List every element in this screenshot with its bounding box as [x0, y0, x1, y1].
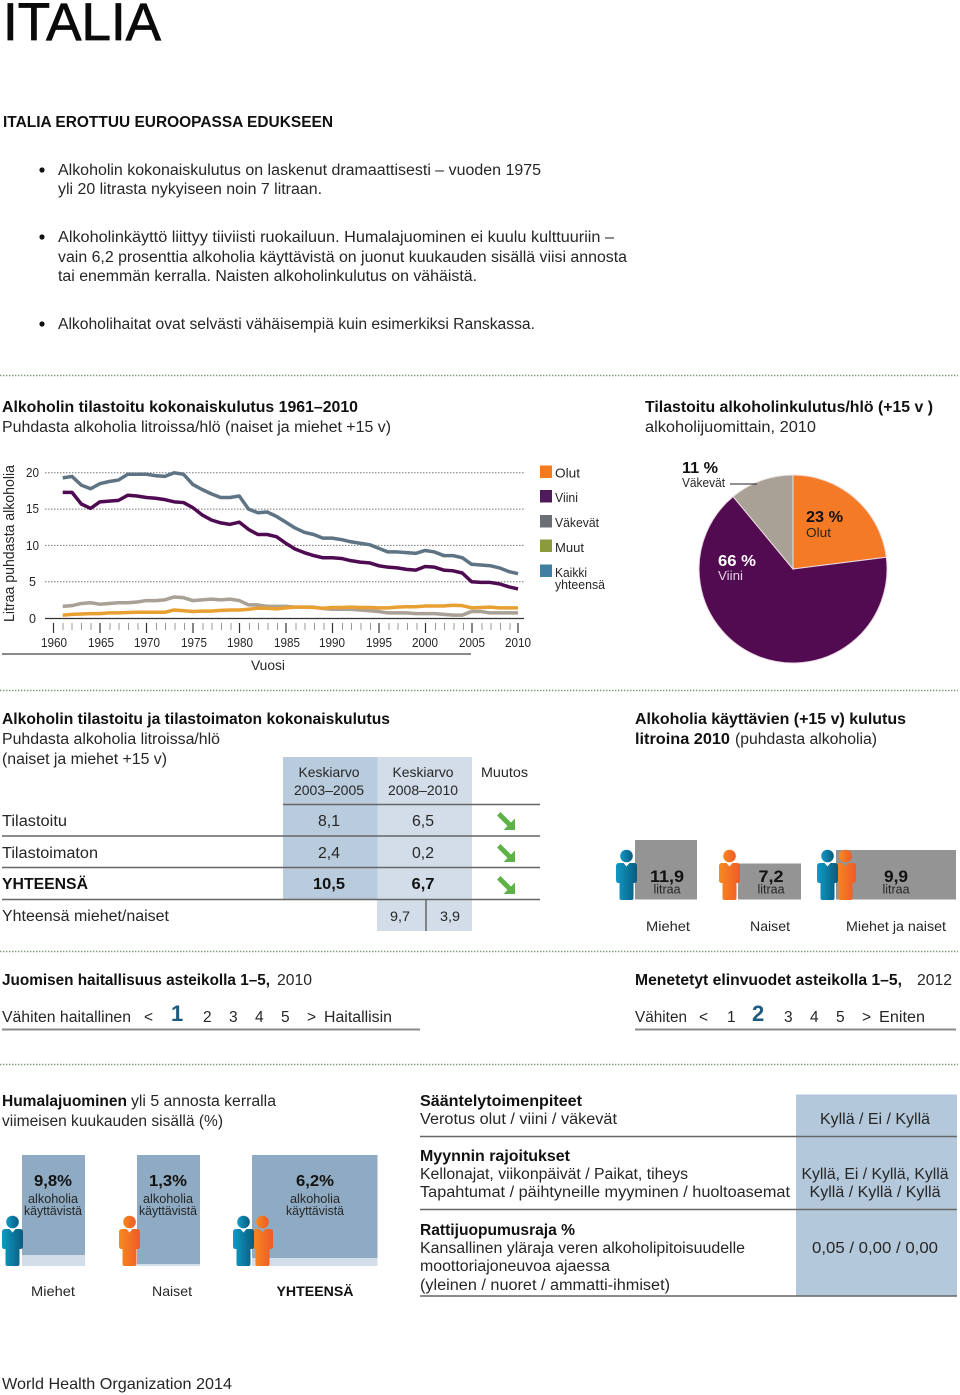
heading: consumption by beverage: alkoholijuomittain, 2010 — [645, 419, 816, 436]
scale: harmfulness of drinking: Juomisen haitallisuus asteikolla 1–5, — [2, 972, 270, 989]
pictogram: men heavy drinking: käyttävistä — [24, 1203, 83, 1218]
x axis labels: 1995 — [366, 636, 392, 650]
heading: total consumption chart: Alkoholin tilastoitu kokonaiskulutus 1961–2010 — [2, 399, 358, 416]
pictogram: women heavy drinking: 1,3% — [149, 1173, 187, 1190]
y axis labels: 5 — [29, 575, 36, 589]
y axis labels: 15 — [26, 502, 39, 516]
pictogram: men litres: litraa — [654, 882, 681, 896]
row: sales restrictions: Kellonajat, viikonpäivät / Paikat, tiheys — [420, 1166, 688, 1183]
label: spirits: 11 % — [682, 460, 718, 477]
heading: heavy episodic drinking: Humalajuominen — [2, 1093, 127, 1110]
pictogram: total heavy drinking: alkoholia — [290, 1191, 341, 1206]
pictogram: men heavy drinking: 9,8% — [34, 1173, 72, 1190]
x axis labels: 1960 — [41, 636, 67, 650]
pictogram: women heavy drinking: alkoholia — [143, 1191, 194, 1206]
row: sales restrictions: Tapahtumat / päihtyneille myyminen / huoltoasemat — [420, 1184, 791, 1201]
scale: harmfulness of drinking: 2 — [203, 1009, 212, 1026]
row: regulation — [420, 1093, 930, 1128]
row: drink-driving limit: (yleinen / nuoret / ammatti-ihmiset) — [420, 1277, 670, 1294]
pictogram: women litres — [719, 850, 801, 934]
pictogram: total heavy drinking: YHTEENSÄ — [276, 1283, 354, 1299]
legend: yhteensä — [555, 578, 605, 592]
scale: harmfulness of drinking: 1 — [171, 1001, 183, 1026]
x axis labels: 1980 — [227, 636, 253, 650]
row: sales restrictions: Kyllä / Kyllä / Kyllä — [810, 1184, 941, 1201]
x axis labels: 1975 — [181, 636, 207, 650]
label: wine: Viini — [718, 569, 743, 583]
row: sales restrictions: Myynnin rajoitukset — [420, 1148, 570, 1165]
y axis labels: 10 — [26, 539, 39, 553]
text block: key points — [39, 162, 627, 333]
pie chart: consumption by beverage — [682, 460, 887, 663]
heading: recorded and unrecorded consumption: Puhdasta alkoholia litroissa/hlö — [2, 731, 220, 748]
pictogram: women litres: Naiset — [750, 918, 790, 934]
row: regulation: Sääntelytoimenpiteet — [420, 1093, 582, 1110]
pictogram: men litres: Miehet — [646, 918, 690, 934]
scale: harmfulness of drinking: < — [144, 1009, 153, 1026]
heading: heavy episodic drinking: viimeisen kuukauden sisällä (%) — [2, 1113, 223, 1130]
pictogram: total heavy drinking — [233, 1155, 378, 1299]
scale: harmfulness of drinking: Haitallisin — [324, 1009, 392, 1026]
pictogram: total heavy drinking: 6,2% — [296, 1173, 334, 1190]
pictogram: men litres — [616, 840, 697, 934]
row: men/women — [2, 908, 460, 925]
heading: consumption of drinkers: litroina 2010 — [635, 731, 730, 748]
row: sales restrictions: Kyllä, Ei / Kyllä, Kyllä — [802, 1166, 949, 1183]
label: beer — [806, 509, 843, 540]
heading: consumption by beverage — [645, 399, 933, 436]
scale: years of life lost: Eniten — [879, 1009, 925, 1026]
legend: Kaikki — [555, 566, 587, 580]
row: total: YHTEENSÄ — [2, 876, 88, 893]
pictogram: men litres: 11,9 — [650, 867, 684, 886]
pictogram: all litres: litraa — [882, 882, 910, 896]
x axis title: Vuosi — [251, 657, 285, 673]
legend: Olut — [555, 466, 581, 480]
scale: years of life lost: 1 — [727, 1009, 736, 1026]
legend: Viini — [555, 491, 578, 505]
column headers: Muutos — [481, 764, 528, 780]
label: beer: Olut — [806, 526, 832, 540]
pictogram: men heavy drinking: alkoholia — [28, 1191, 79, 1206]
column headers: 2008–2010 — [388, 782, 458, 798]
table: recorded and unrecorded consumption — [2, 757, 540, 931]
y axis title: Litraa puhdasta alkoholia — [2, 464, 18, 622]
pictogram: all litres — [817, 850, 956, 934]
scale: harmfulness of drinking: 5 — [281, 1009, 290, 1026]
scale: harmfulness of drinking: 4 — [255, 1009, 264, 1026]
row: men/women: 3,9 — [440, 908, 460, 924]
row: total: 10,5 — [313, 876, 345, 893]
heading: total consumption chart: Puhdasta alkoholia litroissa/hlö (naiset ja miehet +15 v) — [2, 419, 391, 436]
row: recorded: 8,1 — [318, 813, 340, 830]
x axis labels: 2010 — [505, 636, 531, 650]
scale: harmfulness of drinking: > — [307, 1009, 316, 1026]
x axis labels: 1990 — [319, 636, 345, 650]
row: total — [2, 876, 515, 894]
row: regulation: Kyllä / Ei / Kyllä — [820, 1111, 930, 1128]
y axis labels: 20 — [26, 466, 39, 480]
heading: recorded and unrecorded consumption: Alkoholin tilastoitu ja tilastoimaton kokonaiskulutus — [2, 711, 390, 728]
series lines — [63, 473, 518, 615]
row: total: 6,7 — [412, 876, 434, 893]
row: unrecorded: 0,2 — [412, 845, 434, 862]
legend: Väkevät — [555, 516, 600, 530]
x axis labels: 1970 — [134, 636, 160, 650]
pictogram: all litres: Miehet ja naiset — [846, 918, 946, 934]
heading: consumption of drinkers: (puhdasta alkoholia) — [735, 731, 877, 748]
series: spirits — [63, 597, 518, 615]
heading: heavy episodic drinking — [2, 1093, 276, 1130]
x axis labels: 1965 — [88, 636, 114, 650]
column headers: Keskiarvo — [298, 764, 360, 780]
row: regulation: Verotus olut / viini / väkevät — [420, 1111, 618, 1128]
row: recorded: Tilastoitu — [2, 813, 67, 830]
pictogram: men heavy drinking: Miehet — [31, 1283, 75, 1299]
heading: total consumption chart — [2, 399, 391, 436]
scale: years of life lost: > — [862, 1009, 871, 1026]
pictogram: all litres: 9,9 — [884, 867, 908, 886]
row: unrecorded: 2,4 — [318, 845, 340, 862]
x axis labels: 2000 — [412, 636, 438, 650]
heading: consumption by beverage: Tilastoitu alkoholinkulutus/hlö (+15 v ) — [645, 399, 933, 416]
row: drink-driving limit — [420, 1222, 938, 1294]
scale: harmfulness of drinking: 3 — [229, 1009, 238, 1026]
row: men/women: 9,7 — [390, 908, 410, 924]
column headers: Keskiarvo — [392, 764, 454, 780]
pictogram: women heavy drinking: Naiset — [152, 1283, 192, 1299]
pictogram: women heavy drinking: käyttävistä — [139, 1203, 198, 1218]
scale: years of life lost: 2 — [752, 1001, 764, 1026]
y axis labels: 0 — [29, 612, 36, 626]
label: beer: 23 % — [806, 509, 843, 526]
scale: years of life lost: 4 — [810, 1009, 819, 1026]
x axis labels: 2005 — [459, 636, 485, 650]
table: policy measures — [420, 1093, 957, 1296]
row: drink-driving limit: Kansallinen yläraja veren alkoholipitoisuudelle — [420, 1240, 745, 1257]
pictogram: total heavy drinking: käyttävistä — [286, 1203, 345, 1218]
label: spirits: Väkevät — [682, 476, 725, 490]
text block: key points: yli 20 litrasta nykyiseen noin 7 litraan. — [58, 181, 322, 198]
scale: harmfulness of drinking: 2010 — [277, 972, 312, 989]
text block: key points: vain 6,2 prosenttia alkoholia käyttävistä on juonut kuukauden sisällä viisi annosta — [58, 249, 627, 266]
pictogram: women litres: litraa — [758, 882, 785, 896]
scale: years of life lost: < — [699, 1009, 708, 1026]
row: recorded — [2, 812, 515, 830]
label: wine: 66 % — [718, 553, 756, 570]
scale: harmfulness of drinking — [2, 972, 420, 1030]
legend — [540, 466, 605, 592]
label: spirits — [682, 460, 725, 490]
heading: consumption of drinkers: Alkoholia käyttävien (+15 v) kulutus — [635, 711, 906, 728]
source note: World Health Organization 2014 — [2, 1376, 232, 1393]
row: men/women: Yhteensä miehet/naiset — [2, 908, 170, 925]
heading: recorded and unrecorded consumption: (naiset ja miehet +15 v) — [2, 751, 167, 768]
heading: recorded and unrecorded consumption — [2, 711, 390, 768]
row: sales restrictions — [420, 1148, 949, 1201]
scale: years of life lost: Menetetyt elinvuodet asteikolla 1–5, — [635, 972, 902, 989]
row: drink-driving limit: Rattijuopumusraja % — [420, 1222, 575, 1239]
column headers: 2003–2005 — [294, 782, 364, 798]
series: wine — [63, 492, 518, 589]
label: wine — [718, 553, 756, 583]
column headers — [294, 764, 528, 798]
x axis labels — [41, 636, 531, 650]
heading: consumption of drinkers — [635, 711, 906, 748]
text block: key points: Alkoholin kokonaiskulutus on laskenut dramaattisesti – vuoden 1975 — [58, 162, 541, 179]
row: unrecorded: Tilastoimaton — [2, 845, 98, 862]
pictogram: women litres: 7,2 — [758, 867, 784, 886]
scale: harmfulness of drinking: Vähiten haitallinen — [2, 1009, 131, 1026]
legend: Muut — [555, 541, 585, 555]
x axis labels: 1985 — [274, 636, 300, 650]
pictogram: women heavy drinking — [119, 1155, 200, 1299]
text block: key points: Alkoholihaitat ovat selvästi vähäisempiä kuin esimerkiksi Ranskassa. — [58, 316, 535, 333]
pictogram: men heavy drinking — [2, 1155, 85, 1299]
y axis labels — [26, 466, 39, 626]
scale: years of life lost — [635, 972, 956, 1030]
scale: years of life lost: 3 — [784, 1009, 793, 1026]
scale: years of life lost: 2012 — [917, 972, 952, 989]
text block: key points: tai enemmän kerralla. Naisten alkoholinkulutus on vähäistä. — [58, 268, 477, 285]
row: drink-driving limit: moottoriajoneuvoa ajaessa — [420, 1258, 610, 1275]
row: recorded: 6,5 — [412, 813, 434, 830]
heading: summary: ITALIA EROTTUU EUROOPASSA EDUKSEEN — [3, 114, 333, 131]
heading: heavy episodic drinking: yli 5 annosta kerralla — [131, 1093, 276, 1110]
scale: years of life lost: Vähiten — [635, 1009, 687, 1026]
row: unrecorded — [2, 844, 515, 862]
scale: years of life lost: 5 — [836, 1009, 845, 1026]
series: total — [63, 473, 518, 574]
row: drink-driving limit: 0,05 / 0,00 / 0,00 — [812, 1240, 938, 1257]
line chart: consumption 1961-2010 — [2, 464, 531, 673]
text block: key points: Alkoholinkäyttö liittyy tiiviisti ruokailuun. Humalajuominen ei kuulu kulttuuriin – — [58, 229, 614, 246]
series: beer — [63, 605, 518, 615]
